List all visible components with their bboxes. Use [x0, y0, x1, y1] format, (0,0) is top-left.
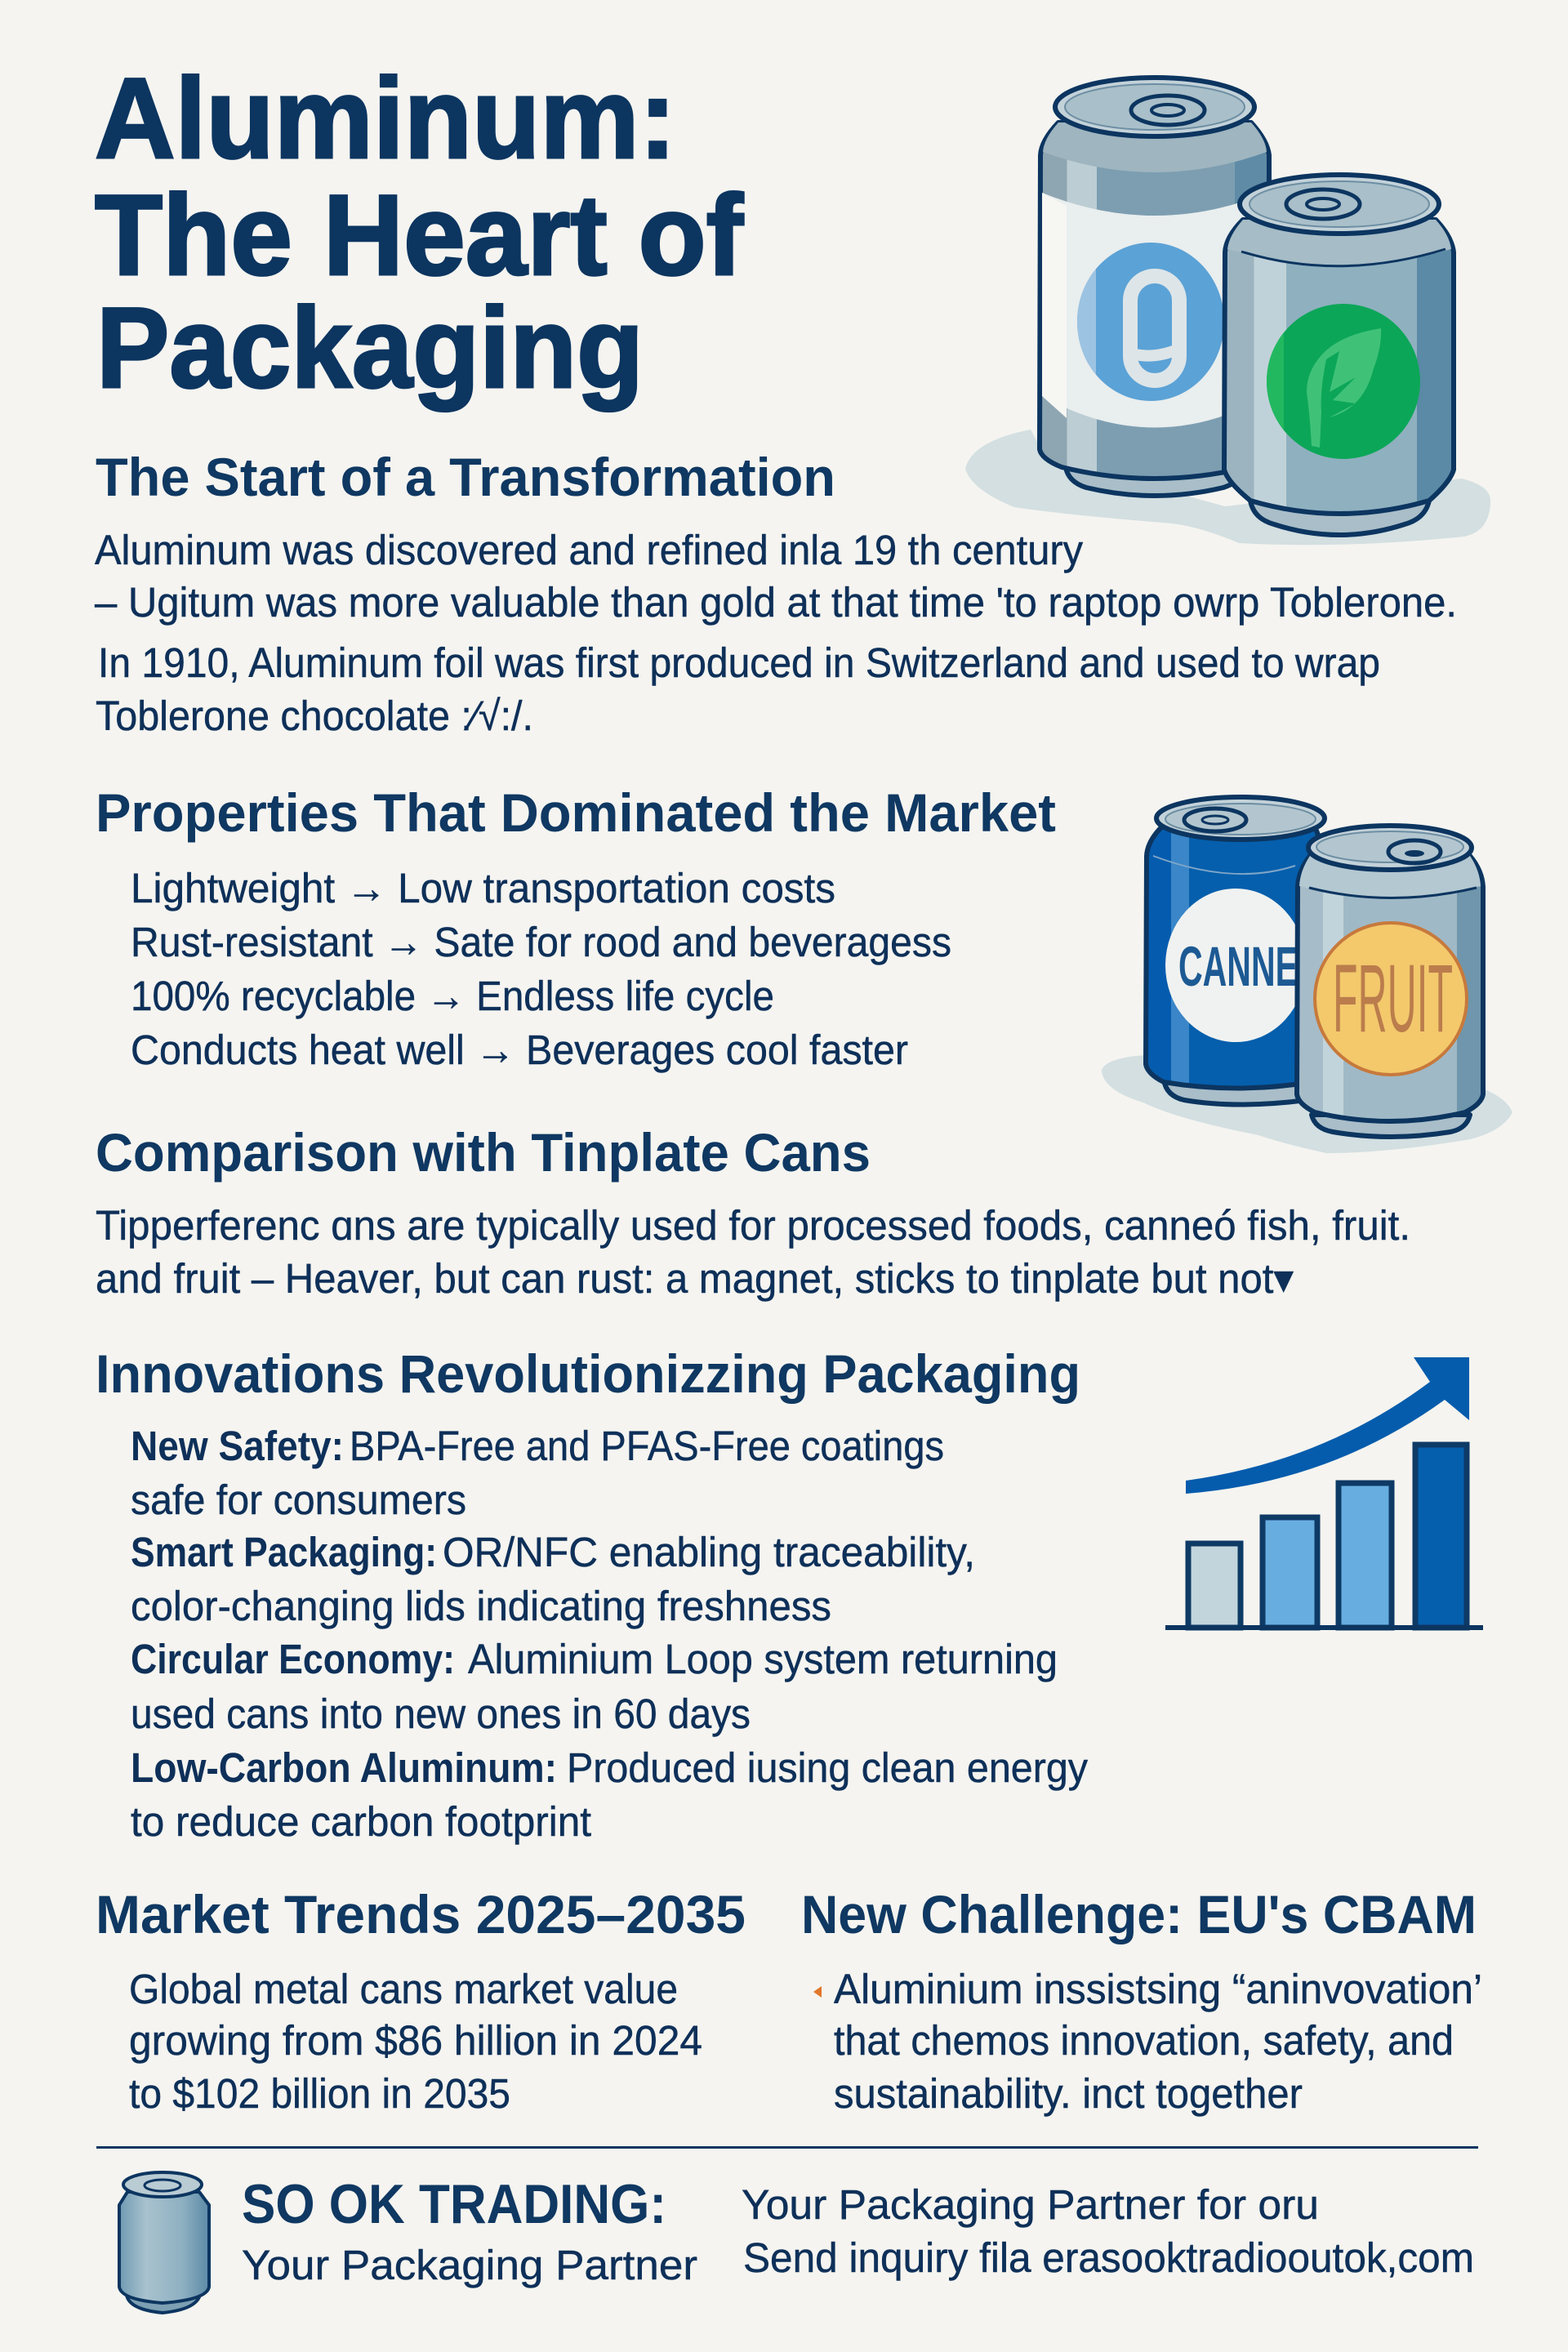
- can with blue badge: [1040, 78, 1269, 496]
- list: innovations: [131, 1423, 1088, 1845]
- footer: contact: Send inquiry fila erasooktradiooutok,com: [743, 2234, 1474, 2281]
- illustration: two aluminum cans: [965, 78, 1490, 545]
- list: innovations: Produced iusing clean energy: [567, 1744, 1088, 1791]
- blue can: CANNE: [1178, 935, 1298, 998]
- icon: orange marker: [813, 1986, 822, 1998]
- section heading: start of a transformation: The Start of a Transformation: [96, 447, 835, 507]
- list: innovations: Circular Economy:: [131, 1636, 455, 1682]
- list: innovations: Aluminium Loop system returning: [468, 1636, 1058, 1682]
- section heading: new challenge: New Challenge: EU's CBAM: [801, 1884, 1477, 1944]
- list: innovations: color-changing lids indicating freshness: [131, 1583, 831, 1629]
- text block: comparison: Tipperferenc ɑns are typically used for processed foods, canneó fish, fruit.: [96, 1202, 1410, 1249]
- text block: comparison: [96, 1202, 1410, 1302]
- list: innovations: BPA-Free and PFAS-Free coatings: [350, 1423, 944, 1469]
- text block: market trends: growing from $86 hillion in 2024: [129, 2017, 702, 2064]
- text block: market trends: to $102 billion in 2035: [129, 2070, 510, 2117]
- footer: company name: Your Packaging Partner: [242, 2242, 697, 2288]
- section heading: market trends: Market Trends 2025–2035: [96, 1884, 746, 1944]
- section heading: comparison: Comparison with Tinplate Cans: [96, 1122, 871, 1183]
- list: innovations: to reduce carbon footprint: [131, 1798, 591, 1845]
- footer: company name: [242, 2173, 697, 2288]
- section heading: innovations: Innovations Revolutionizzing Packaging: [96, 1343, 1080, 1404]
- list: innovations: Low-Carbon Aluminum:: [131, 1744, 557, 1791]
- text block: new challenge: that chemos innovation, safety, and: [834, 2017, 1454, 2064]
- footer: company name: SO OK TRADING:: [242, 2173, 666, 2235]
- text block: market trends: [129, 1966, 702, 2117]
- list: properties: [131, 865, 951, 1073]
- title: The Heart of: [95, 171, 743, 299]
- silver fruit can: [1297, 826, 1483, 1137]
- can with green leaf badge: [1224, 175, 1454, 535]
- list: innovations: safe for consumers: [131, 1477, 466, 1523]
- text block: history: – Ugitum was more valuable than gold at that time 'to raptop owrp Toblerone.: [95, 579, 1457, 626]
- text block: history: In 1910, Aluminum foil was first produced in Switzerland and used to wrap: [98, 639, 1380, 686]
- illustration: canned goods: [1102, 797, 1512, 1153]
- bar chart with rising arrow: [1165, 1357, 1483, 1630]
- list: innovations: OR/NFC enabling traceability,: [443, 1529, 975, 1575]
- title: [95, 54, 743, 412]
- title: Packaging: [96, 283, 644, 412]
- list: properties: Lightweight → Low transportation costs: [131, 865, 835, 911]
- list: properties: Rust-resistant → Sate for rood and beveragess: [131, 919, 951, 965]
- list: innovations: New Safety:: [131, 1423, 344, 1469]
- icon: footer can: [119, 2172, 209, 2313]
- footer: contact: [742, 2181, 1474, 2281]
- text block: market trends: Global metal cans market value: [129, 1966, 678, 2012]
- text block: history: Toblerone chocolate :⁄√:/.: [96, 693, 533, 739]
- arrow: [1186, 1357, 1469, 1494]
- list: properties: Conducts heat well → Beverages cool faster: [131, 1027, 908, 1073]
- list: properties: 100% recyclable → Endless life cycle: [131, 973, 774, 1019]
- text block: history: [95, 527, 1457, 739]
- text block: comparison: and fruit – Heaver, but can rust: a magnet, sticks to tinplate but not▾: [96, 1255, 1294, 1302]
- list: innovations: used cans into new ones in 60 days: [131, 1690, 751, 1737]
- text block: history: Aluminum was discovered and refined inla 19 th century: [95, 527, 1083, 573]
- blue can: [1146, 797, 1326, 1104]
- list: innovations: Smart Packaging:: [131, 1529, 437, 1575]
- text block: new challenge: Aluminium inssistsing “aninvovation’: [834, 1966, 1482, 2012]
- footer: contact: Your Packaging Partner for oru: [742, 2181, 1319, 2228]
- text block: new challenge: sustainability. inct together: [834, 2070, 1303, 2117]
- section heading: properties: Properties That Dominated the Market: [96, 782, 1056, 843]
- text block: new challenge: [813, 1966, 1482, 2117]
- title: Aluminum:: [95, 54, 676, 182]
